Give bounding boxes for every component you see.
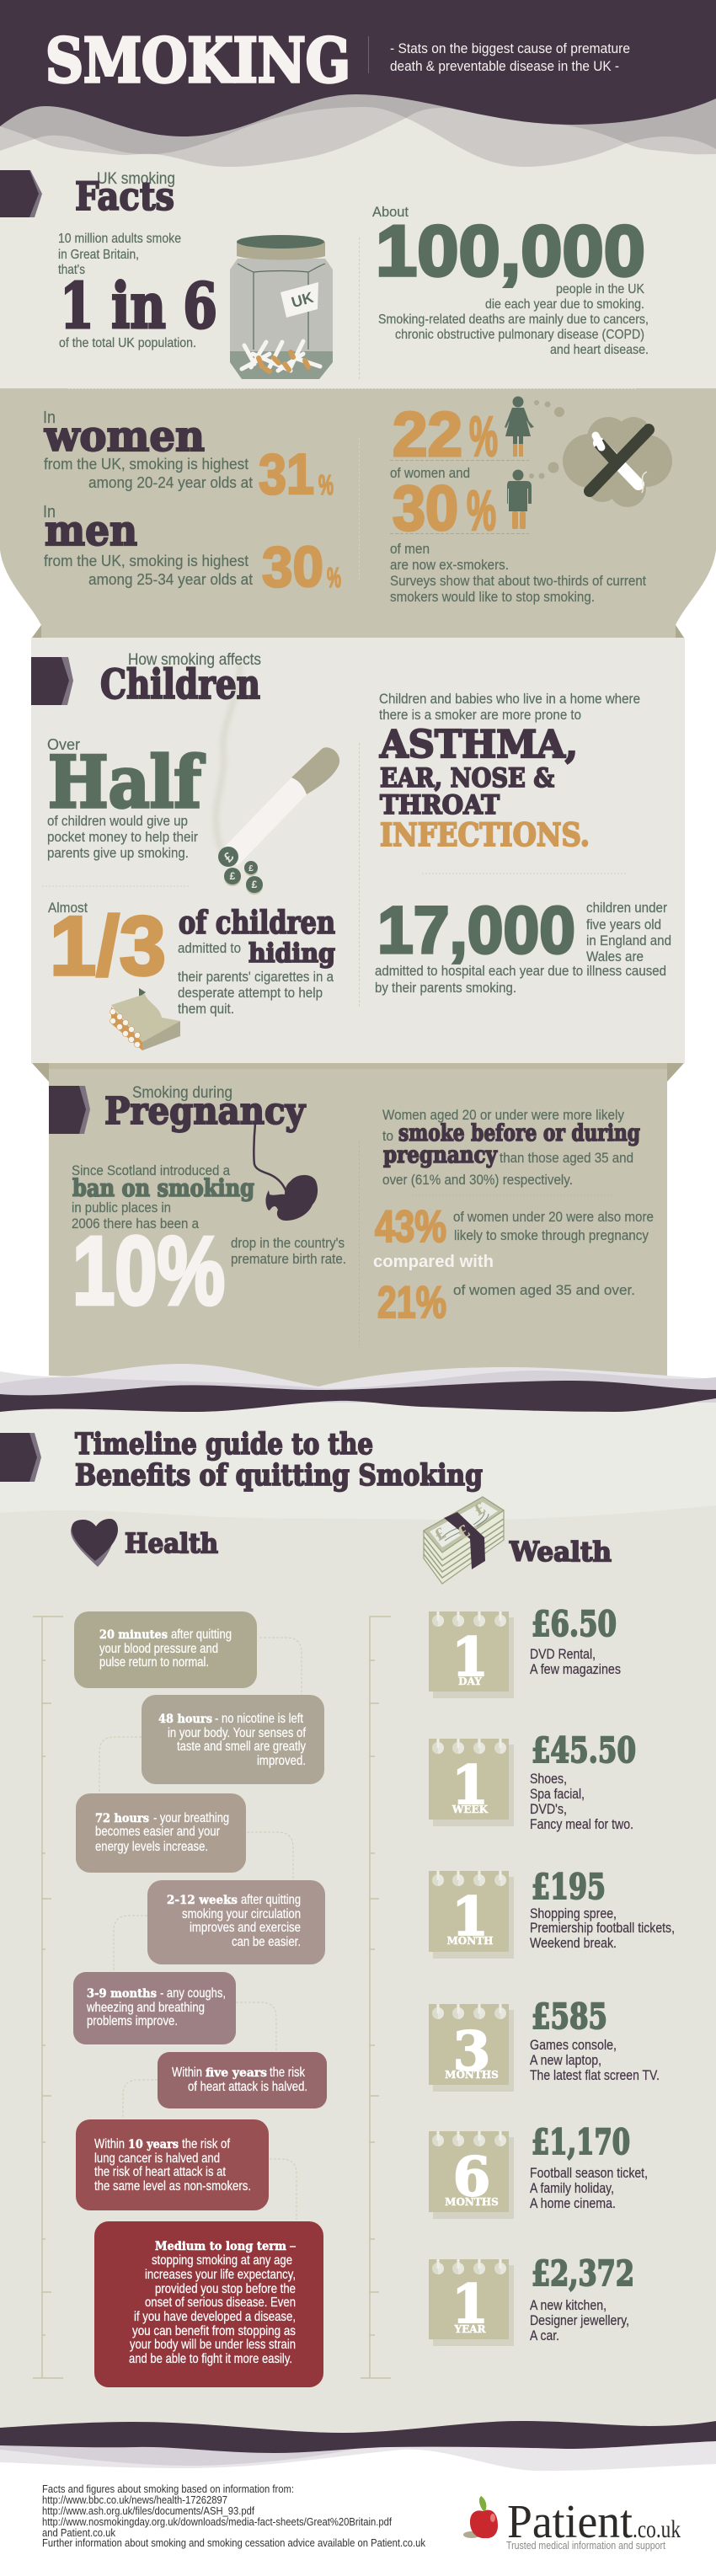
health box: 48 hours: in your body. Your senses of	[168, 1726, 306, 1740]
health box: 48 hours	[142, 1695, 324, 1784]
icon: calendar: 1	[452, 2273, 489, 2335]
heading: wealth: Wealth	[509, 1536, 612, 1568]
text: one third: admitted to	[178, 940, 241, 956]
health box: 2-12 weeks: smoking your circulation	[182, 1907, 301, 1921]
health box: medium to long term: Medium to long term	[155, 2240, 286, 2253]
icon: jar of cigarettes	[230, 235, 333, 379]
footer sources: Further information about smoking and smoking cessation advice available on Patient.co.uk	[42, 2536, 425, 2549]
text: over half: Over	[47, 736, 80, 753]
stat: 100,000	[372, 204, 649, 357]
text: women: from the UK, smoking is highest	[44, 456, 248, 473]
health box: 48 hours: taste and smell are greatly	[177, 1740, 306, 1754]
wealth item: 6 months: A home cinema.	[530, 2195, 616, 2211]
health box: 72 hours: - your breathing	[153, 1811, 229, 1825]
icon: calendar	[429, 1739, 514, 1826]
icon: section chevron	[0, 170, 42, 217]
health box: 10 years: 10 years	[128, 2138, 179, 2151]
wealth item: 3 months: Games console,	[530, 2037, 617, 2053]
text: men: %	[327, 562, 341, 593]
heading: health	[71, 1519, 218, 1567]
header smoke waves	[0, 76, 716, 167]
health box: 10 years: the risk of	[182, 2137, 230, 2151]
stat: ex-smokers: %	[469, 405, 498, 468]
icon: UK label: UK	[290, 289, 315, 311]
stat: 43% vs 21%: 21%	[377, 1278, 446, 1328]
heading: timeline: Benefits of quitting Smoking	[75, 1458, 483, 1493]
text: over half: parents give up smoking.	[47, 845, 189, 861]
stat: 100,000: Smoking-related deaths are mainly due to cancers,	[378, 313, 649, 327]
icon: heart	[71, 1519, 118, 1567]
stat: 17,000: admitted to hospital each year due to illness caused	[375, 963, 666, 979]
logo: Patient.co.uk: Patient	[507, 2496, 633, 2548]
icon: cigarette with coins: £	[222, 850, 237, 865]
text: men	[43, 503, 341, 599]
subtitle: - Stats on the biggest cause of premature	[390, 40, 630, 56]
health box: five years: Within	[172, 2066, 202, 2080]
heading: timeline: Timeline guide to the	[75, 1427, 373, 1462]
text: asthma: INFECTIONS.	[380, 816, 590, 853]
logo: Patient.co.uk	[463, 2496, 681, 2552]
logo: Patient.co.uk: .co.uk	[633, 2515, 681, 2543]
health box: 3-9 months	[73, 1972, 236, 2044]
icon: cigarette with coins: £	[230, 870, 236, 882]
bottom wave divider	[0, 2421, 716, 2576]
subtitle: death & preventable disease in the UK -	[390, 58, 619, 74]
icon: calendar: MONTHS	[445, 2069, 499, 2081]
icon: banknotes	[424, 1497, 504, 1584]
icon: calendar: 1	[452, 1754, 489, 1816]
text: men: 30	[262, 535, 323, 599]
health box: 3-9 months: 3-9 months	[87, 1987, 157, 2001]
icon: man	[507, 470, 532, 529]
icon: calendar	[429, 1871, 514, 1959]
stat: ex-smokers: %	[467, 479, 496, 542]
icon: calendar: MONTHS	[445, 2196, 499, 2208]
stat: ex-smokers: 22	[393, 399, 462, 469]
text: one third: 1/3	[50, 899, 166, 992]
text: before or during pregnancy: Women aged 20 or under were more likely	[382, 1107, 624, 1123]
health box: medium to long term: increases your life expectancy,	[145, 2268, 296, 2282]
icon: cigarette with coins	[218, 747, 339, 895]
text: 1 in 6: 10 million adults smoke	[58, 232, 181, 246]
health box: 72 hours: energy levels increase.	[95, 1840, 208, 1854]
stat: 43% vs 21%: of women aged 35 and over.	[453, 1282, 635, 1298]
health box: 20 minutes: pulse return to normal.	[99, 1655, 209, 1670]
text: over half: of children would give up	[47, 813, 188, 829]
wealth item: 6 months	[429, 2122, 648, 2219]
health box: medium to long term	[94, 2221, 323, 2387]
health box: 48 hours: 48 hours	[158, 1713, 212, 1726]
text: asthma: THROAT	[380, 790, 500, 820]
text: ban on smoking: drop in the country's	[231, 1235, 345, 1251]
text: women: %	[318, 469, 334, 500]
text: before or during pregnancy: over (61% and 30%) respectively.	[382, 1172, 573, 1188]
health box: five years: five years	[206, 2066, 267, 2080]
text: asthma	[379, 691, 640, 853]
health box: medium to long term: provided you stop before the	[155, 2282, 296, 2296]
footer sources: and Patient.co.uk	[42, 2526, 115, 2539]
health box: 72 hours: becomes easier and your	[95, 1825, 221, 1839]
wealth item: 1 day	[429, 1604, 621, 1698]
stat: 100,000: people in the UK	[556, 282, 644, 297]
stat: ex-smokers: Surveys show that about two-thirds of current	[390, 573, 646, 589]
text: before or during pregnancy: to	[382, 1128, 393, 1144]
logo: Patient.co.uk: Trusted medical information and support	[506, 2539, 665, 2552]
heading: health: Health	[125, 1527, 218, 1559]
text: ban on smoking: Since Scotland introduced a	[72, 1162, 230, 1178]
wealth item: 1 month: £195	[532, 1867, 606, 1907]
health box: 2-12 weeks	[147, 1880, 325, 1964]
health box: 3-9 months: - any coughs,	[160, 1986, 226, 2001]
wealth item: 1 year	[429, 2253, 634, 2346]
wealth item: 6 months: £1,170	[532, 2122, 630, 2162]
footer sources	[42, 2482, 425, 2549]
stat: ex-smokers: smokers would like to stop smoking.	[390, 589, 595, 605]
text: ban on smoking: ban on smoking	[72, 1174, 254, 1202]
panel: UK smoking facts	[0, 170, 649, 379]
heading: children: How smoking affects	[128, 651, 261, 669]
icon: calendar: YEAR	[453, 2323, 487, 2335]
text: women: In	[43, 409, 56, 427]
stat: 43% vs 21%: compared with	[373, 1253, 494, 1271]
text: before or during pregnancy: than those aged 35 and	[500, 1150, 633, 1166]
icon: calendar	[429, 2004, 514, 2092]
wealth item: 6 months: Football season ticket,	[530, 2165, 648, 2181]
text: asthma: there is a smoker are more prone to	[379, 707, 581, 723]
text: men: men	[45, 505, 137, 555]
wealth item: 6 months: A family holiday,	[530, 2180, 614, 2196]
stat: 17,000: 17,000	[377, 892, 575, 967]
text: 1 in 6: of the total UK population.	[59, 336, 196, 350]
wealth item: 1 month: Premiership football tickets,	[530, 1920, 675, 1936]
icon: banknotes: £	[471, 1499, 489, 1520]
icon: fetus silhouette	[254, 1124, 318, 1221]
text: one third: hiding	[248, 938, 335, 969]
stat: 100,000: 100,000	[376, 211, 645, 291]
stat: 43% vs 21%: 43%	[375, 1202, 446, 1252]
icon: calendar: 1	[452, 1626, 489, 1688]
icon: calendar: 6	[453, 2146, 490, 2209]
text: one third: their parents' cigarettes in a	[178, 969, 334, 985]
text: asthma: EAR, NOSE &	[380, 763, 554, 794]
wealth item: 3 months: £585	[532, 1996, 607, 2037]
wealth item: 1 year: A car.	[530, 2327, 559, 2344]
text: over half	[47, 736, 205, 861]
heading: timeline	[0, 1427, 483, 1493]
stat: 17,000	[375, 892, 671, 996]
text: one third: of children	[179, 904, 335, 941]
smoke wisp	[216, 661, 240, 851]
text: before or during pregnancy: smoke before or during	[398, 1120, 640, 1146]
stat: 17,000: in England and	[586, 933, 671, 949]
stat: 43% vs 21%: of women under 20 were also more	[453, 1209, 654, 1225]
icon: section chevron	[0, 1433, 41, 1482]
health box: 48 hours: improved.	[257, 1754, 306, 1768]
text: before or during pregnancy	[382, 1107, 640, 1188]
health box: 20 minutes	[74, 1611, 257, 1688]
health box: 10 years: Within	[94, 2137, 125, 2151]
text: women: 31	[259, 442, 314, 506]
wealth item: 1 week: DVD's,	[530, 1801, 567, 1817]
stat: 100,000: chronic obstructive pulmonary disease (COPD)	[395, 328, 644, 342]
icon: cigarette with coins: £	[252, 879, 258, 890]
health box: 20 minutes: your blood pressure and	[99, 1642, 218, 1656]
stat: 100,000: About	[372, 204, 409, 220]
stat: ex-smokers: 30	[393, 473, 458, 543]
health box: 72 hours: 72 hours	[95, 1812, 149, 1825]
text: one third: Almost	[48, 900, 88, 916]
heading: pregnancy: Pregnancy	[104, 1090, 306, 1133]
text: men: from the UK, smoking is highest	[44, 553, 248, 569]
icon: calendar: WEEK	[452, 1804, 489, 1815]
icon: cigarette with coins: £	[248, 864, 254, 874]
heading: children	[100, 651, 261, 708]
header banner	[0, 0, 716, 136]
stat: ex-smokers: of women and	[390, 465, 470, 481]
health box: 10 years: the same level as non-smokers.	[94, 2179, 251, 2194]
text: women	[43, 409, 334, 506]
icon: calendar	[429, 2259, 514, 2346]
footer sources: http://www.nosmokingday.org.uk/downloads/media-fact-sheets/Great%20Britain.pdf	[42, 2515, 392, 2528]
page background: facts section	[0, 76, 716, 396]
text: men: In	[43, 503, 56, 521]
heading: facts: UK smoking	[97, 170, 175, 188]
wealth item: 1 month: Weekend break.	[530, 1935, 617, 1951]
stat: ex-smokers: of men	[390, 541, 430, 557]
icon: no smoking cloud	[529, 400, 672, 507]
icon: apple	[463, 2496, 498, 2538]
stat: 43% vs 21%: likely to smoke through pregnancy	[454, 1227, 649, 1243]
wealth item: 1 day: £6.50	[532, 1604, 617, 1644]
health box: 10 years: the risk of heart attack is at	[94, 2165, 226, 2179]
wealth item: 1 year: A new kitchen,	[530, 2297, 606, 2313]
heading: children: Children	[100, 661, 260, 708]
text: asthma: Children and babies who live in a home where	[379, 691, 640, 707]
text: ban on smoking: premature birth rate.	[231, 1251, 346, 1267]
stat: 43% vs 21%	[373, 1202, 654, 1328]
text: 1 in 6: in Great Britain,	[58, 248, 139, 262]
stat: ex-smokers: are now ex-smokers.	[390, 557, 509, 573]
wealth item: 1 week: £45.50	[532, 1730, 636, 1771]
health box: medium to long term: stopping smoking at any age	[152, 2253, 292, 2268]
icon: hidden cigarette pack	[110, 988, 180, 1050]
footer sources: Facts and figures about smoking based on information from:	[42, 2482, 294, 2495]
panel: pregnancy	[32, 1063, 684, 1387]
health box: 3-9 months: wheezing and breathing	[86, 2001, 205, 2015]
stat: 17,000: by their parents smoking.	[375, 980, 516, 996]
icon: calendar	[429, 2131, 514, 2219]
middle wave divider	[0, 1364, 716, 1412]
text: 1 in 6	[58, 232, 217, 350]
wealth item: 1 year: Designer jewellery,	[530, 2312, 629, 2328]
icon: section chevron	[31, 657, 73, 705]
connectors	[99, 1638, 302, 2220]
panel: children	[31, 638, 685, 1063]
wealth item: 1 day: DVD Rental,	[530, 1646, 596, 1662]
text: one third	[48, 899, 335, 1017]
health box: 72 hours	[76, 1793, 246, 1873]
health box: five years: of heart attack is halved.	[188, 2080, 307, 2094]
text: one third: them quit.	[178, 1001, 234, 1017]
subtitle	[390, 40, 630, 74]
heading: pregnancy: Smoking during	[132, 1084, 232, 1102]
health box: five years: the risk	[270, 2066, 306, 2080]
wealth item: 3 months: A new laptop,	[530, 2052, 601, 2068]
health box: 20 minutes: 20 minutes	[99, 1628, 168, 1642]
text: ban on smoking	[72, 1162, 346, 1325]
wealth item: 3 months	[429, 1996, 660, 2092]
health box: medium to long term: –	[290, 2239, 296, 2253]
panel: women and men	[0, 388, 716, 638]
health box: medium to long term: and be able to fight it more easily.	[129, 2352, 292, 2366]
timeline rails	[33, 1617, 391, 2378]
icon: banknotes: £	[453, 1520, 473, 1544]
health box: medium to long term: onset of serious disease. Even	[145, 2295, 296, 2310]
text: ban on smoking: in public places in	[72, 1200, 171, 1216]
text: asthma: ASTHMA,	[379, 722, 578, 767]
wealth item: 1 month: Shopping spree,	[530, 1905, 617, 1921]
text: one third: desperate attempt to help	[178, 985, 323, 1001]
stat: 100,000: die each year due to smoking.	[485, 297, 644, 312]
stat: ex-smokers	[390, 399, 646, 605]
health box: medium to long term: you can benefit from stopping as	[132, 2324, 296, 2338]
icon: woman	[505, 396, 534, 457]
text: women: among 20-24 year olds at	[88, 474, 253, 491]
icon: UK label	[281, 282, 318, 318]
wealth item: 1 week	[429, 1730, 636, 1832]
health box: 2-12 weeks: can be easier.	[232, 1935, 301, 1949]
stat: 17,000: five years old	[586, 917, 661, 933]
health box: 48 hours: - no nicotine is left	[215, 1712, 303, 1726]
stat: 100,000: and heart disease.	[550, 343, 649, 357]
wealth item: 1 week: Shoes,	[530, 1771, 567, 1787]
footer sources: http://www.ash.org.uk/files/documents/ASH_93.pdf	[42, 2504, 254, 2517]
icon: calendar: MONTH	[447, 1935, 493, 1947]
text: men: among 25-34 year olds at	[88, 571, 253, 588]
text: over half: pocket money to help their	[47, 829, 198, 845]
icon: calendar: DAY	[458, 1675, 482, 1687]
icon: banknotes: £	[431, 1525, 449, 1545]
title: SMOKING	[45, 24, 350, 96]
text: over half: Half	[48, 740, 205, 824]
wealth item: 3 months: The latest flat screen TV.	[530, 2067, 660, 2083]
stat: 17,000: Wales are	[586, 949, 644, 965]
stat: 17,000: children under	[586, 900, 667, 916]
text: women: women	[44, 411, 205, 461]
text: ban on smoking: 10%	[72, 1217, 225, 1325]
health box: medium to long term: if you have developed a disease,	[134, 2310, 296, 2324]
text: before or during pregnancy: pregnancy	[383, 1142, 498, 1168]
health box: medium to long term: your body will be under less strain	[130, 2338, 296, 2352]
timeline background	[0, 1398, 716, 2434]
icon: section chevron	[49, 1086, 90, 1134]
health box: 2-12 weeks: after quitting	[241, 1893, 301, 1907]
health box: five years	[158, 2052, 327, 2108]
text: ban on smoking: 2006 there has been a	[72, 1216, 199, 1232]
text: 1 in 6: 1 in 6	[60, 270, 217, 343]
wealth item: 1 day: A few magazines	[530, 1661, 621, 1677]
health box: 20 minutes: after quitting	[171, 1627, 232, 1642]
heading: facts: Facts	[75, 174, 174, 219]
health box: 3-9 months: problems improve.	[87, 2014, 178, 2028]
health box: 10 years: lung cancer is halved and	[94, 2151, 220, 2166]
text: 1 in 6: that's	[58, 263, 85, 277]
wealth item: 1 year: £2,372	[532, 2253, 634, 2294]
heading: wealth	[424, 1497, 612, 1584]
wealth item: 1 week: Fancy meal for two.	[530, 1816, 633, 1832]
footer sources: http://www.bbc.co.uk/news/health-17262897	[42, 2493, 227, 2506]
icon: calendar	[429, 1611, 514, 1698]
health box: 2-12 weeks: improves and exercise	[190, 1921, 301, 1935]
health box: 10 years	[76, 2119, 269, 2210]
icon: calendar: 1	[452, 1885, 489, 1948]
health box: 2-12 weeks: 2-12 weeks	[167, 1894, 238, 1907]
icon: calendar: 3	[453, 2020, 490, 2083]
wealth item: 1 week: Spa facial,	[530, 1786, 585, 1802]
wealth item: 1 month	[429, 1867, 675, 1959]
